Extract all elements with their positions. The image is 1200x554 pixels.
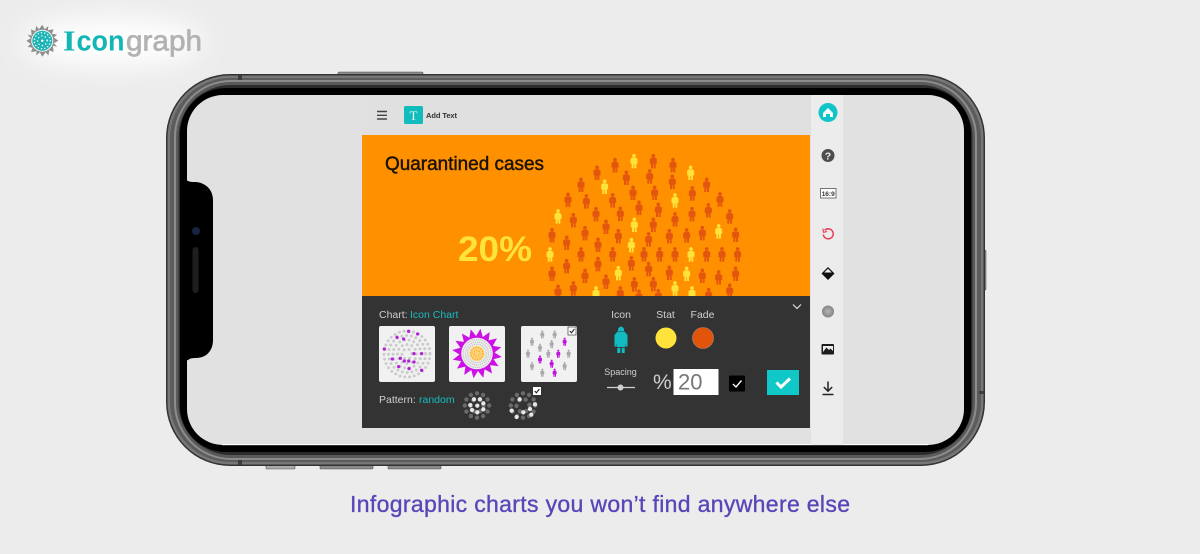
notch (186, 180, 213, 361)
icon: fill bucket (822, 267, 834, 280)
icon: collapse chevron (793, 304, 801, 308)
column labels: Icon (611, 309, 631, 321)
fade people (548, 154, 741, 304)
column labels: Stat (656, 309, 675, 321)
icon chart: people (546, 154, 741, 304)
pattern checkbox (533, 387, 541, 395)
icon: menu (377, 112, 387, 119)
add text button: T (410, 108, 418, 123)
pattern: random (509, 387, 541, 419)
thumbnail checkbox (568, 327, 576, 335)
icon: aspect ratio: 16:9 (822, 191, 835, 198)
chart label: Icon Chart (410, 309, 459, 321)
column labels (611, 309, 715, 321)
pattern label: Pattern: (379, 394, 416, 406)
column labels: Fade (691, 309, 715, 321)
fade colour swatch (692, 328, 714, 348)
icon: help: ? (825, 150, 831, 162)
phone frame (166, 74, 985, 466)
sidebar (811, 95, 843, 445)
spacing control: Spacing (604, 367, 637, 377)
logo wordmark: I (63, 26, 76, 58)
icon: help (822, 149, 834, 162)
logo wordmark: graph (126, 26, 202, 58)
percent input (653, 369, 718, 395)
chart canvas (362, 135, 810, 304)
stat percentage: 20% (458, 230, 532, 269)
confirm button (767, 370, 799, 395)
thumbnail: people chart (521, 326, 577, 382)
icon: aspect ratio (820, 188, 836, 198)
caption: Infographic charts you won’t find anywhere else (350, 491, 850, 517)
phone side buttons (266, 72, 986, 469)
pattern label: random (419, 394, 455, 406)
chart label: Chart: (379, 309, 408, 321)
spacing control (604, 367, 637, 390)
logo wordmark: con (76, 26, 124, 58)
camera (192, 227, 200, 235)
icon: colour ball (822, 306, 834, 318)
add text button: Add Text (426, 111, 458, 120)
app toolbar (362, 95, 811, 135)
pattern: clustered (465, 393, 489, 418)
stat colour swatch (656, 328, 676, 348)
stat people (546, 154, 722, 301)
control panel (362, 296, 810, 428)
percent input: % (653, 371, 672, 394)
add text button (404, 106, 458, 124)
logo glow (20, 18, 204, 66)
icon: image (822, 344, 834, 354)
thumbnail: dots chart (379, 326, 435, 382)
speaker (192, 247, 198, 293)
percent input: 20 (678, 370, 702, 394)
icon: download (822, 382, 834, 394)
icon: logo sunburst (26, 25, 58, 57)
icon: home (818, 103, 838, 122)
thumbnail: sunburst chart (449, 325, 505, 382)
screen (187, 95, 964, 445)
show checkbox (729, 376, 745, 392)
logo wordmark (63, 26, 202, 58)
chart title: Quarantined cases (385, 153, 544, 175)
icon: undo (823, 229, 833, 239)
icon: protective gown person (614, 327, 628, 353)
logo (26, 25, 202, 58)
phone (166, 72, 986, 469)
